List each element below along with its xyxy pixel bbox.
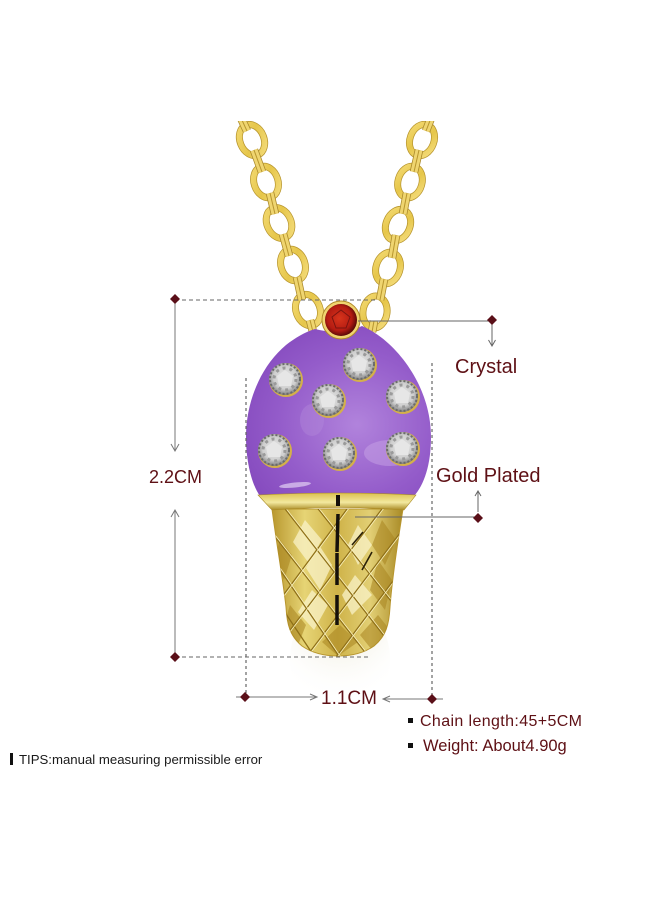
measurement: height dashed guides — [175, 300, 376, 657]
measurement: height arrows — [170, 294, 180, 662]
spec: chain length: Chain length:45+5CM — [420, 713, 582, 730]
spec: weight: Weight: About4.90g — [423, 737, 567, 755]
measurement: width dotted guides — [246, 363, 432, 699]
icon: red crystal — [322, 301, 360, 339]
cone reflection — [290, 598, 390, 722]
necklace chain: right side — [361, 118, 439, 332]
label: crystal: Crystal — [455, 356, 517, 378]
necklace chain: left side — [235, 118, 325, 332]
pendant: gold cone — [272, 508, 404, 656]
pendant: gold collar band — [258, 493, 416, 510]
collar center mark — [336, 495, 340, 506]
label: gold plated: Gold Plated — [436, 465, 541, 487]
pendant: purple enamel scoop — [246, 326, 431, 496]
measurement: width arrows — [236, 692, 443, 704]
clear crystal stones — [258, 348, 420, 471]
label: height: 2.2CM — [149, 467, 202, 487]
tips note: TIPS:manual measuring permissible error — [19, 752, 263, 767]
label: width: 1.1CM — [321, 688, 377, 709]
callout: crystal leader — [358, 315, 497, 346]
callout: gold plated leader — [355, 491, 483, 523]
